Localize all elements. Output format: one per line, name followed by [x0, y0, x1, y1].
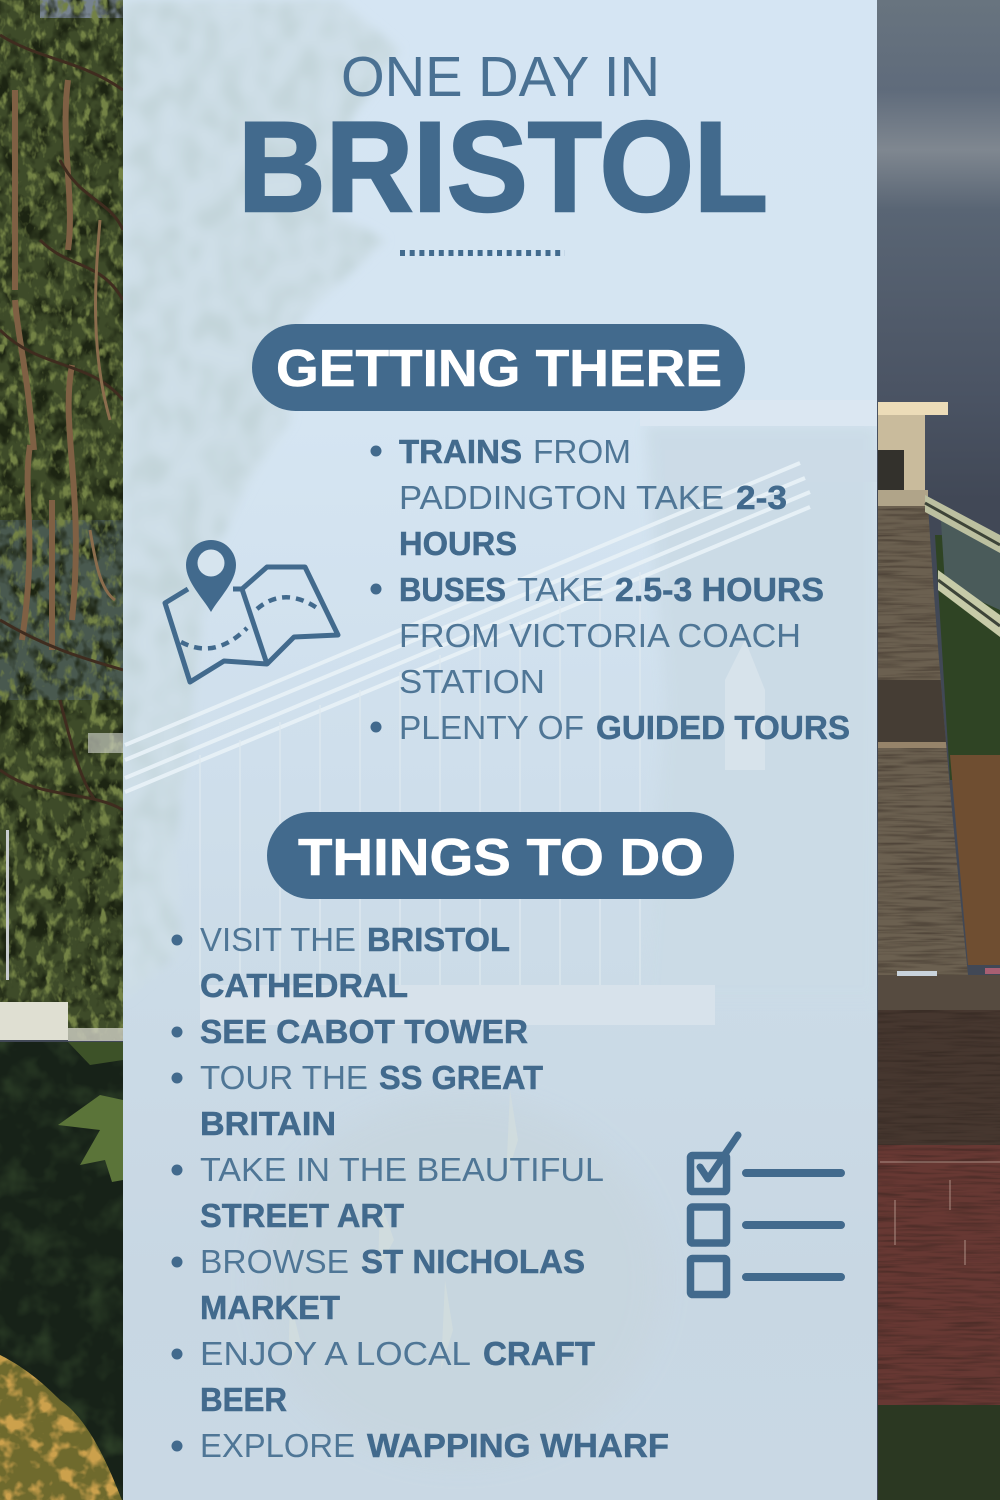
title line: one day in: ONE DAY IN	[341, 45, 660, 109]
tree and gorge on the left	[0, 0, 123, 1500]
ghosted gorge foliage	[260, 1100, 660, 1460]
list: getting there: TAKE	[517, 571, 604, 608]
list: things to do: VISIT THE	[200, 921, 356, 958]
list: things to do	[172, 921, 669, 1464]
section heading: getting there: GETTING THERE	[276, 340, 722, 398]
list: things to do: SS GREAT	[379, 1059, 543, 1096]
list: things to do: BRITAIN	[200, 1105, 336, 1142]
list: getting there: TRAINS	[399, 433, 522, 470]
list: getting there: BUSES	[399, 571, 506, 608]
list: things to do: ST NICHOLAS	[361, 1243, 585, 1280]
ghosted bridge cables	[125, 463, 810, 792]
list: things to do: TOUR THE	[200, 1059, 368, 1096]
list: getting there: FROM	[533, 433, 631, 470]
list: things to do: BEER	[200, 1381, 287, 1418]
list: getting there: HOURS	[399, 525, 517, 562]
ghosted tower	[650, 430, 872, 640]
list: getting there: 2-3	[736, 479, 787, 516]
list: things to do: BROWSE	[200, 1243, 349, 1280]
list: things to do: TAKE IN THE BEAUTIFUL	[200, 1151, 604, 1188]
list: things to do: WAPPING WHARF	[367, 1427, 669, 1464]
section heading: things to do: THINGS TO DO	[298, 829, 704, 887]
list: things to do: BRISTOL	[367, 921, 510, 958]
section heading: things to do	[267, 812, 734, 899]
list: getting there: 2.5-3 HOURS	[615, 571, 824, 608]
dotted divider	[400, 250, 565, 256]
list: getting there: PLENTY OF	[399, 709, 584, 746]
list: getting there	[370, 433, 850, 746]
list: things to do: STREET ART	[200, 1197, 404, 1234]
title	[238, 45, 768, 239]
icon: checklist	[690, 1135, 841, 1294]
icon: map with location pin	[165, 540, 338, 682]
list: getting there: PADDINGTON TAKE	[399, 479, 724, 516]
suspension chains	[925, 495, 1000, 553]
title line: Bristol: BRISTOL	[238, 96, 768, 239]
tower with cap	[878, 505, 968, 975]
wall and brick pier	[878, 975, 1000, 1010]
list: things to do: SEE CABOT TOWER	[200, 1013, 528, 1050]
list: things to do: CRAFT	[483, 1335, 595, 1372]
list: getting there: FROM VICTORIA COACH	[399, 617, 801, 654]
list: things to do: ENJOY A LOCAL	[200, 1335, 471, 1372]
ghosted tree top left	[123, 0, 413, 1000]
list: getting there: GUIDED TOURS	[596, 709, 850, 746]
list: things to do: EXPLORE	[200, 1427, 355, 1464]
translucent panel	[123, 0, 877, 1500]
ghosted bridge deck	[200, 985, 715, 1025]
distant trees on the right	[935, 535, 1000, 780]
section heading: getting there	[252, 324, 745, 411]
list: getting there: STATION	[399, 663, 545, 700]
list: things to do: CATHEDRAL	[200, 967, 408, 1004]
list: things to do: MARKET	[200, 1289, 340, 1326]
